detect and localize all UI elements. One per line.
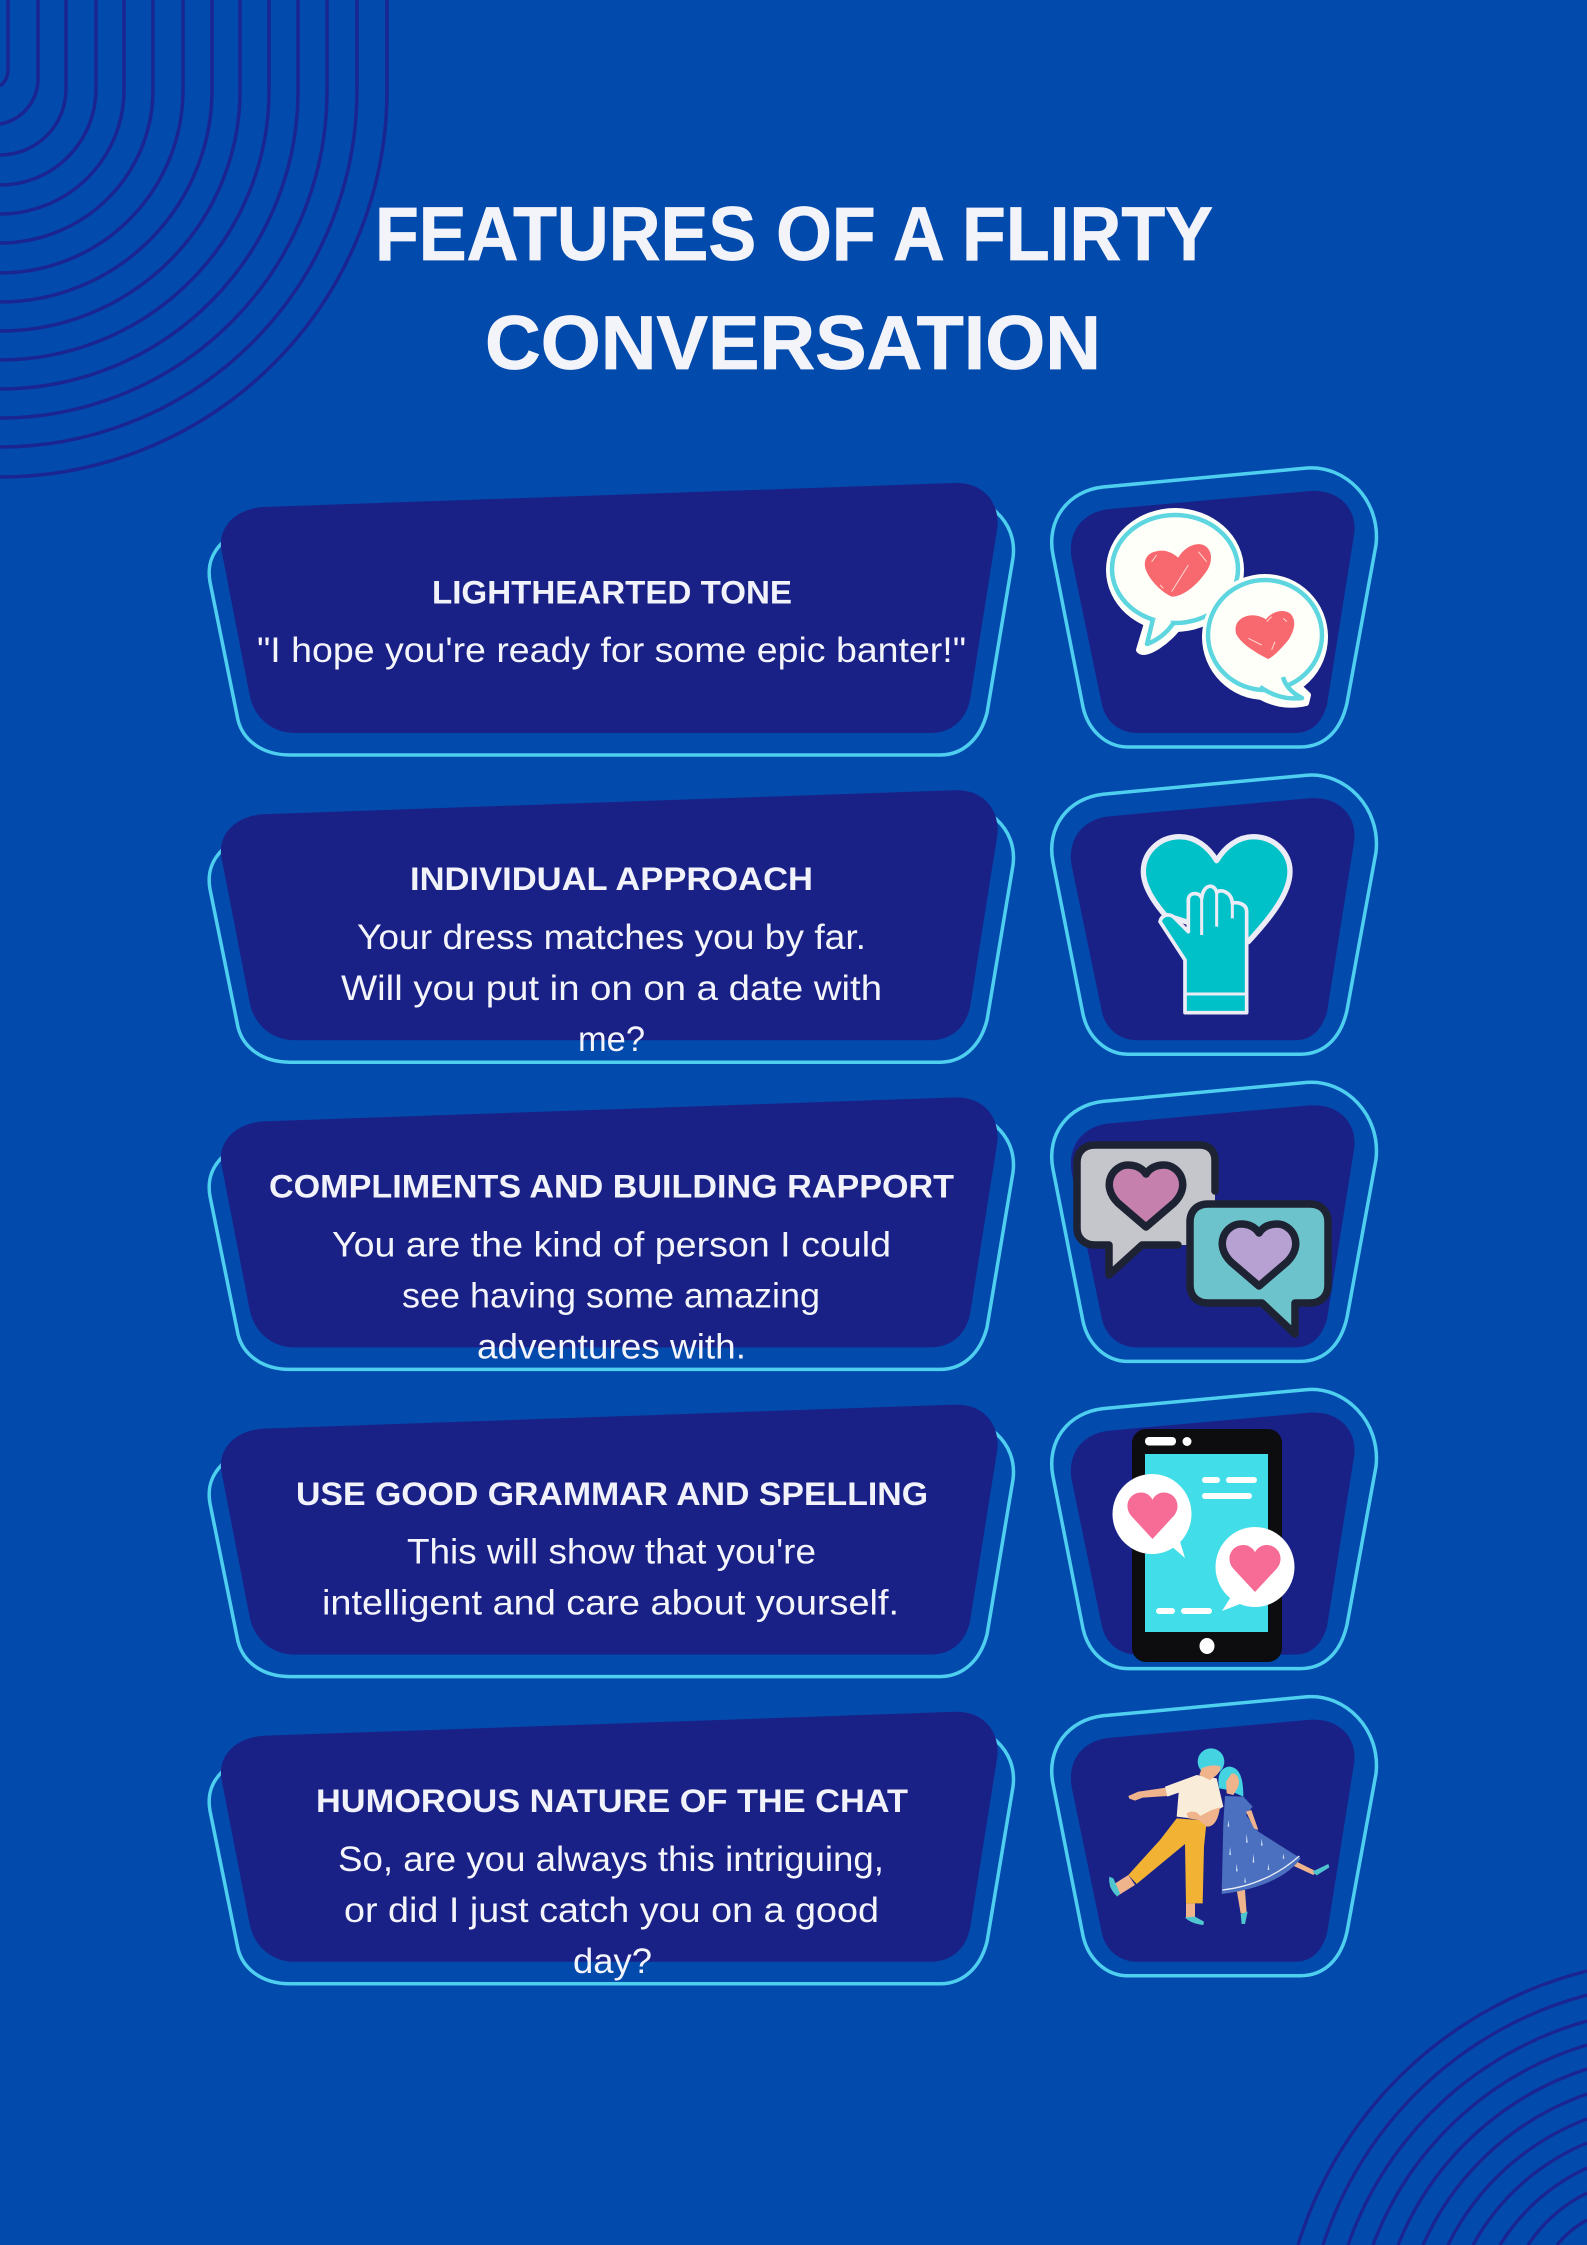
body text: day?: [573, 1942, 652, 1981]
icon card: [1052, 1697, 1376, 1976]
heading: LIGHTHEARTED TONE: [432, 574, 792, 610]
body text: [338, 1840, 884, 1981]
icon card: [1052, 775, 1376, 1054]
body text: [341, 918, 882, 1059]
body text: adventures with.: [477, 1328, 746, 1366]
body text: [332, 1226, 891, 1366]
icon card: [1052, 468, 1376, 747]
body text: Your dress matches you by far.: [357, 918, 866, 957]
heading: HUMOROUS NATURE OF THE CHAT: [316, 1783, 908, 1819]
panel: compliments and building rapport: [209, 1097, 1014, 1369]
body text: So, are you always this intriguing,: [338, 1840, 884, 1879]
body text: see having some amazing: [402, 1276, 820, 1316]
icon panel: speech bubbles with hearts: [1052, 468, 1376, 747]
heading: USE GOOD GRAMMAR AND SPELLING: [296, 1476, 928, 1512]
panel: humorous nature of the chat: [209, 1712, 1014, 1984]
icon: two speech bubbles: [1106, 508, 1328, 705]
card outline and fill: [209, 1712, 1014, 1984]
body text: This will show that you're: [407, 1532, 816, 1572]
icon card: [1052, 1389, 1376, 1669]
title: FEATURES OF A FLIRTY: [375, 192, 1213, 277]
panel: use good grammar and spelling: [209, 1405, 1014, 1677]
title: [375, 192, 1213, 386]
icon: chat bubbles: [1077, 1145, 1328, 1334]
icon panel: dancing couple: [1052, 1697, 1376, 1976]
heading: INDIVIDUAL APPROACH: [410, 861, 813, 897]
body text: You are the kind of person I could: [332, 1226, 891, 1264]
card outline and fill: [209, 790, 1014, 1062]
icon: hand on heart: [1143, 837, 1290, 1013]
panel: lighthearted tone: [209, 483, 1014, 755]
panel: individual approach: [209, 790, 1014, 1062]
heading: COMPLIMENTS AND BUILDING RAPPORT: [269, 1168, 954, 1204]
icon: phone: [1112, 1429, 1294, 1662]
body text: intelligent and care about yourself.: [322, 1584, 899, 1622]
title: CONVERSATION: [485, 301, 1101, 386]
body text: me?: [578, 1020, 645, 1059]
icon panel: hand on heart: [1052, 775, 1376, 1054]
card outline and fill: [209, 1405, 1014, 1677]
body text: [322, 1532, 899, 1622]
icon panel: phone with hearts: [1052, 1389, 1376, 1669]
card outline and fill: [209, 1097, 1014, 1369]
body text: Will you put in on on a date with: [341, 969, 882, 1008]
body text: "I hope you're ready for some epic banter!": [257, 631, 966, 670]
icon card: [1052, 1082, 1376, 1361]
body text: or did I just catch you on a good: [344, 1891, 879, 1930]
card outline and fill: [209, 483, 1014, 755]
icon: dancing couple: [1109, 1748, 1329, 1925]
icon panel: chat bubbles with hearts: [1052, 1082, 1376, 1361]
